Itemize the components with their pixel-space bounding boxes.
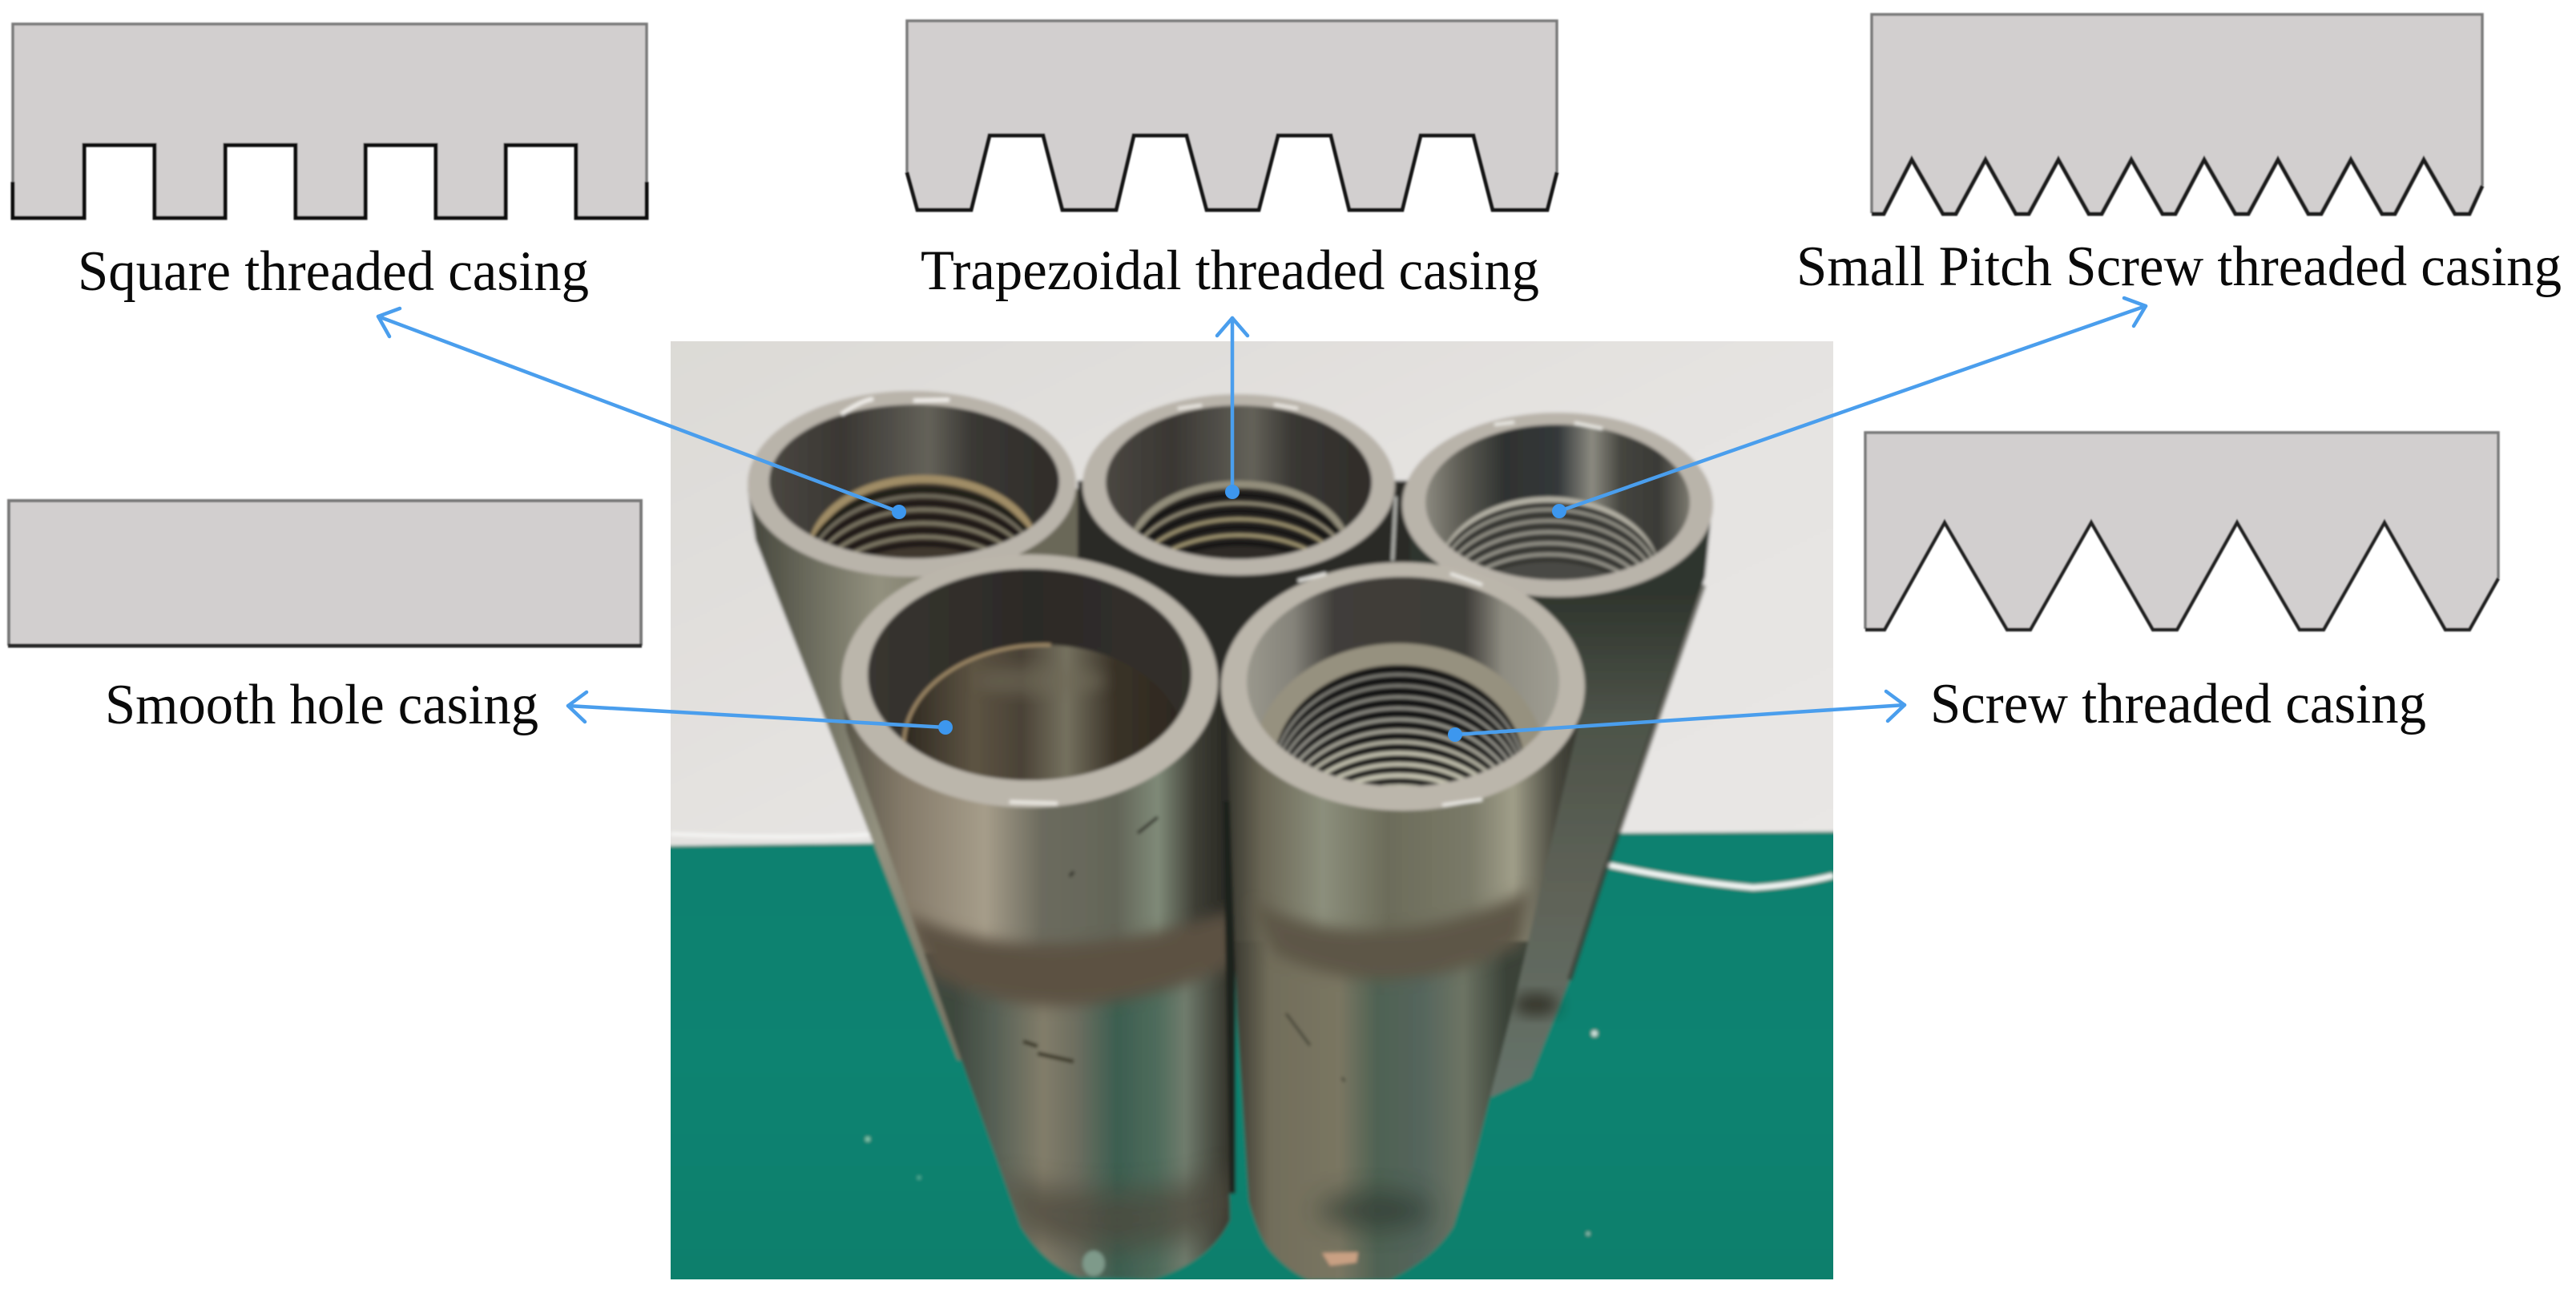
label: square threaded casing: Square threaded casing	[78, 240, 589, 303]
photo: five steel casings on a green table	[663, 333, 1841, 1290]
arrow: to trapezoidal threaded casing label	[1217, 318, 1248, 499]
label: small pitch screw threaded casing: Small Pitch Screw threaded casing	[1796, 236, 2562, 298]
panel: trapezoidal thread profile	[907, 20, 1557, 211]
tube: back middle dark body	[1075, 478, 1409, 804]
arrow: to screw threaded casing label	[1448, 691, 1905, 742]
tube: front left body	[843, 706, 1232, 1279]
rim: back left	[746, 389, 1078, 578]
rim: front left with smooth bore	[839, 552, 1221, 810]
tube: back left	[748, 487, 1082, 1064]
panel: smooth hole profile	[8, 499, 642, 646]
panel: small pitch screw thread profile	[1872, 14, 2482, 215]
panel: square thread profile	[13, 23, 647, 219]
label: screw threaded casing: Screw threaded casing	[1930, 673, 2426, 735]
arrow: to small pitch screw threaded casing label	[1552, 298, 2146, 518]
arrow: to square threaded casing label	[378, 308, 906, 519]
rim: front right with threaded bore	[1218, 559, 1588, 813]
dark gap between front tubes	[1221, 801, 1236, 1194]
tube: front right body	[1228, 724, 1578, 1279]
tube: back right	[1402, 513, 1711, 1097]
arrow: to smooth hole casing label	[568, 692, 953, 735]
rim: back right	[1399, 411, 1715, 600]
rim: back middle	[1080, 393, 1398, 578]
label: smooth hole casing: Smooth hole casing	[105, 674, 538, 736]
label: trapezoidal threaded casing: Trapezoidal threaded casing	[921, 240, 1539, 302]
panel: screw thread profile	[1865, 431, 2498, 630]
